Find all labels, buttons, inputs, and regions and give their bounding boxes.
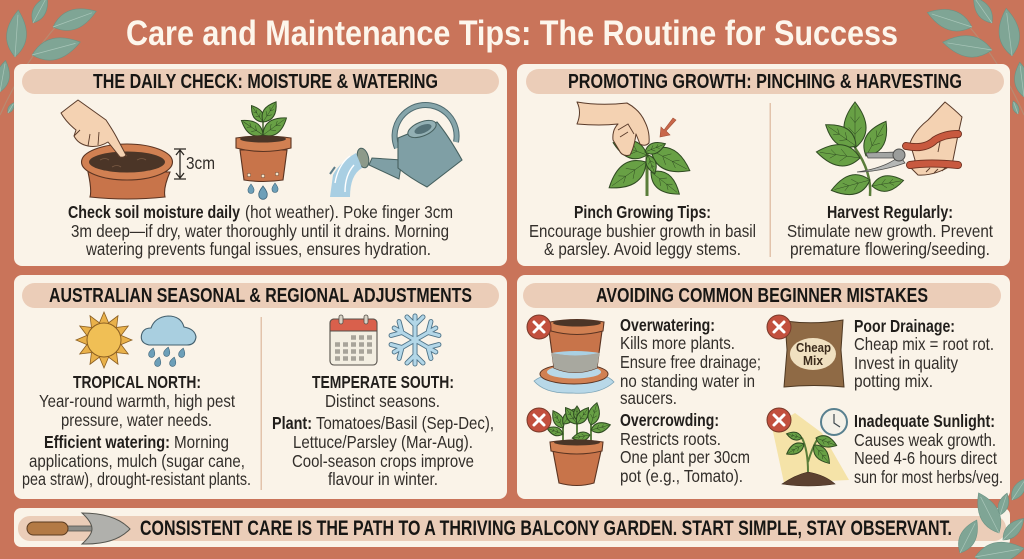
decorative leaves: bottom right: [953, 475, 1024, 559]
text block: overwatering: [620, 315, 761, 408]
divider: [770, 103, 771, 257]
text block: overcrowding: One plant per 30cm: [620, 447, 750, 467]
icon: poor drainage warning badge: [767, 315, 791, 339]
text block: poor drainage: Poor Drainage:: [854, 316, 955, 336]
text block: poor drainage: Invest in quality: [854, 353, 958, 373]
text block: tropical north: pea straw), drought-resistant plants.: [22, 469, 251, 489]
text block: poor drainage: potting mix.: [854, 371, 933, 391]
title: Care and Maintenance Tips: The Routine for Success: [126, 14, 898, 53]
text block: tropical north: Morning: [174, 432, 229, 452]
text block: harvest regularly: Harvest Regularly:: [827, 202, 953, 222]
text block: inadequate sunlight: Inadequate Sunlight:: [854, 411, 995, 431]
decorative leaves: top left: [0, 0, 100, 115]
text block: daily check: watering prevents fungal issues, ensures hydration.: [85, 239, 431, 259]
icon: inadequate sunlight warning badge: [767, 408, 791, 432]
dimension: 3cm depth: 3cm: [186, 153, 215, 173]
text block: temperate south: TEMPERATE SOUTH:: [312, 372, 454, 392]
text block: inadequate sunlight: [854, 411, 1003, 487]
icon: calendar: [330, 315, 377, 365]
icon: basil plant: [603, 135, 695, 201]
text block: tropical north: Efficient watering:: [44, 432, 170, 452]
panel: footer banner: [14, 508, 1010, 547]
heading: beginner mistakes: AVOIDING COMMON BEGINNER MISTAKES: [596, 285, 928, 307]
icon: cheap mix bag: Mix: [803, 353, 824, 368]
icon: snowflake: [390, 316, 440, 364]
text block: tropical north: applications, mulch (sugar cane,: [29, 451, 245, 471]
text block: overcrowding: pot (e.g., Tomato).: [620, 466, 743, 486]
text block: pinch growing tips: [529, 202, 756, 259]
text block: harvest regularly: premature flowering/seeding.: [790, 239, 990, 259]
text block: overwatering: Kills more plants.: [620, 333, 735, 353]
text block: overwatering: saucers.: [620, 388, 677, 408]
panel: the daily check: [14, 64, 507, 266]
text block: tropical north: Year-round warmth, high pest: [39, 391, 235, 411]
icon: hand with pruners: [857, 102, 962, 175]
heading: daily check: THE DAILY CHECK: MOISTURE & WATERING: [93, 71, 438, 93]
text block: temperate south: Cool-season crops improve: [292, 451, 474, 471]
panel: seasonal adjustments: [14, 275, 507, 499]
panel: beginner mistakes: [517, 275, 1010, 499]
text block: temperate south: Plant:: [272, 413, 312, 433]
text block: temperate south: Lettuce/Parsley (Mar-Aug).: [293, 432, 473, 452]
text block: temperate south: Tomatoes/Basil (Sep-Dec),: [316, 413, 494, 433]
heading: seasonal adjustments: AUSTRALIAN SEASONAL & REGIONAL ADJUSTMENTS: [49, 285, 472, 307]
icon: harvested plant: [815, 102, 905, 200]
text block: pinch growing tips: Pinch Growing Tips:: [574, 202, 711, 222]
icon: clock: [821, 409, 847, 435]
arrow: pinch point: [660, 118, 676, 137]
icon: seedling in weak light: [772, 413, 849, 486]
icon: wide pot with soil: [82, 144, 172, 199]
text block: pinch growing tips: & parsley. Avoid leggy stems.: [544, 239, 741, 259]
decorative leaves: top right: [924, 0, 1024, 115]
text block: poor drainage: Cheap mix = root rot.: [854, 334, 994, 354]
text block: overcrowding: Overcrowding:: [620, 410, 719, 430]
icon: overcrowding warning badge: [527, 408, 551, 432]
icon: overwatering warning badge: [527, 315, 551, 339]
icon: watering can: [330, 105, 462, 197]
icon: cheap mix bag: Cheap: [796, 340, 831, 355]
text block: daily check: 3m deep—if dry, water thoroughly until it drains. Morning: [71, 221, 449, 241]
text block: temperate south: [272, 372, 494, 489]
text block: daily check: Check soil moisture daily: [68, 202, 240, 222]
panel: promoting growth: [517, 64, 1010, 266]
icon: hand poking soil: [61, 100, 126, 157]
text block: temperate south: Distinct seasons.: [325, 391, 440, 411]
text block: temperate south: flavour in winter.: [328, 469, 438, 489]
text block: pinch growing tips: Encourage bushier growth in basil: [529, 221, 756, 241]
text block: daily check: (hot weather). Poke finger 3cm: [245, 202, 453, 222]
text block: overcrowding: Restricts roots.: [620, 429, 721, 449]
text block: harvest regularly: [787, 202, 993, 259]
icon: overwatered pot: [534, 320, 614, 393]
dimension: 3cm depth: [174, 149, 215, 179]
text block: harvest regularly: Stimulate new growth. Prevent: [787, 221, 993, 241]
icon: small potted seedling with drainage: [236, 99, 291, 199]
divider: [260, 317, 262, 490]
text block: daily check: [68, 202, 453, 259]
text block: overwatering: Overwatering:: [620, 315, 715, 335]
text block: tropical north: TROPICAL NORTH:: [73, 372, 201, 392]
text block: inadequate sunlight: Need 4-6 hours direct: [854, 448, 997, 468]
icon: overcrowded pot: [546, 401, 612, 486]
icon: sun: [76, 312, 132, 368]
text block: overcrowding: [620, 410, 750, 486]
icon: trowel: [27, 513, 130, 544]
text block: inadequate sunlight: Causes weak growth.: [854, 430, 996, 450]
icon: rain cloud: [141, 316, 196, 367]
icon: cheap mix bag: [784, 320, 844, 387]
text block: tropical north: [22, 372, 251, 489]
text block: overwatering: Ensure free drainage;: [620, 352, 761, 372]
text block: overwatering: no standing water in: [620, 371, 755, 391]
text block: tropical north: pressure, water needs.: [61, 410, 212, 430]
icon: pinching hand: [577, 102, 649, 155]
text block: poor drainage: [854, 316, 994, 391]
